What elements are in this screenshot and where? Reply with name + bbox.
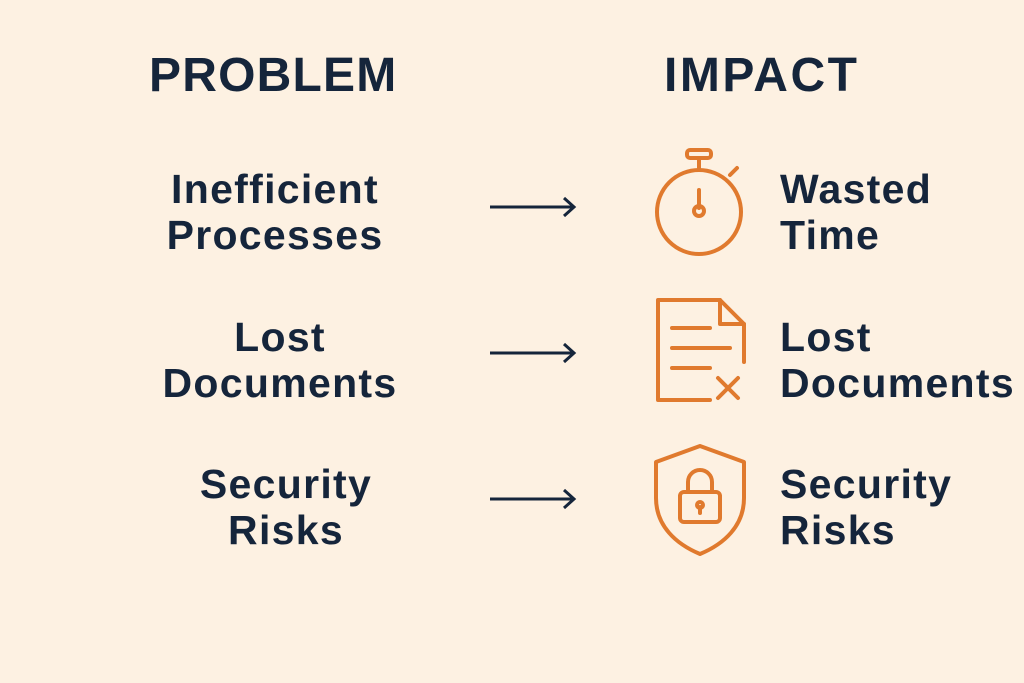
problem text: security risks [200, 461, 372, 553]
impact text: lost documents [780, 314, 1015, 406]
impact text: wasted time [780, 166, 932, 258]
problem text: security risks: Risks [228, 507, 344, 553]
impact text: security risks: Risks [780, 507, 896, 553]
arrow 2 [490, 342, 576, 363]
impact text: lost documents: Lost [780, 314, 872, 360]
heading: impact: IMPACT [664, 49, 859, 102]
heading: problem: PROBLEM [149, 49, 397, 102]
problem text: inefficient processes [167, 166, 383, 258]
impact text: wasted time: Wasted [780, 166, 932, 212]
impact text: security risks [780, 461, 952, 553]
icon: stopwatch [655, 148, 743, 256]
impact text: lost documents: Documents [780, 360, 1015, 406]
problem text: inefficient processes: Processes [167, 212, 383, 258]
impact text: security risks: Security [780, 461, 952, 507]
problem text: lost documents [163, 314, 397, 406]
problem text: lost documents: Documents [163, 360, 397, 406]
arrow 3 [490, 488, 576, 509]
problem text: lost documents: Lost [234, 314, 326, 360]
arrow 1 [490, 196, 576, 217]
problem text: inefficient processes: Inefficient [171, 166, 379, 212]
icon: document with x [656, 298, 746, 402]
impact text: wasted time: Time [780, 212, 880, 258]
problem text: security risks: Security [200, 461, 372, 507]
icon: shield with lock [654, 444, 746, 556]
